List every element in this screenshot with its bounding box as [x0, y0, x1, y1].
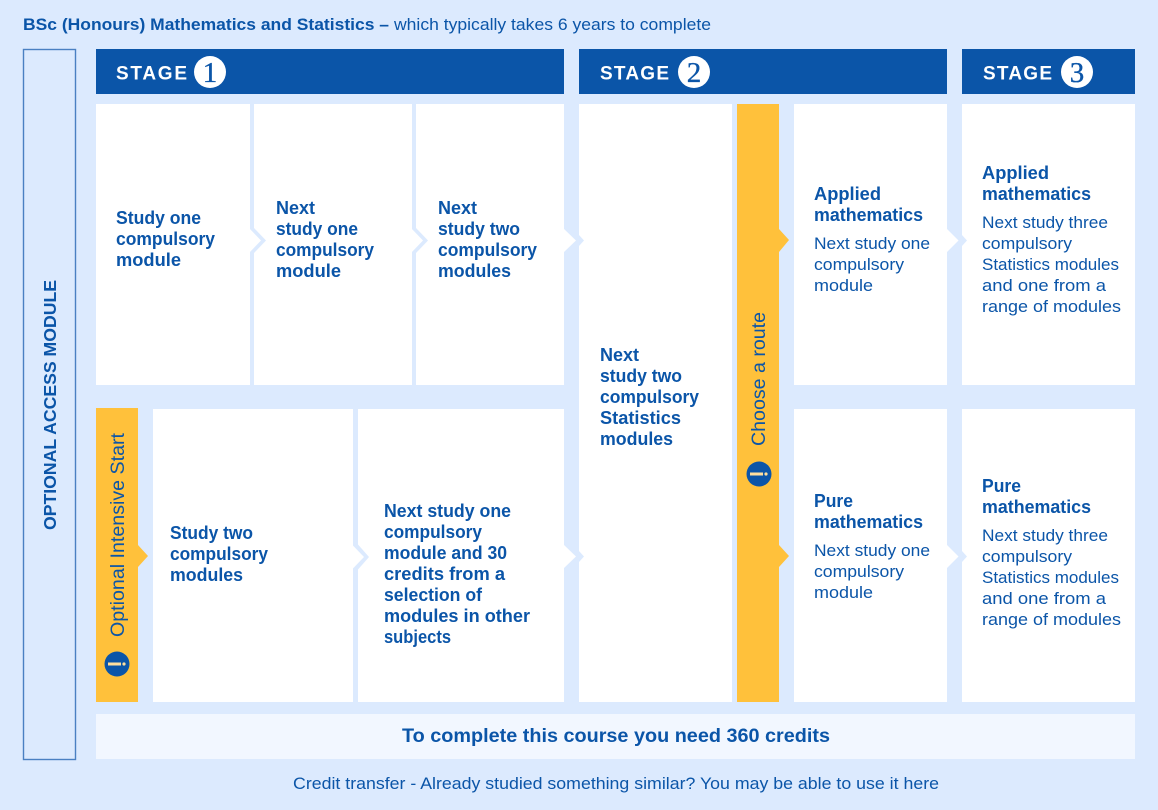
- card: stage 1 third modules: modules: [438, 261, 511, 281]
- card: stage 2 compulsory statistics modules: modules: [600, 429, 673, 449]
- card: stage 3 applied mathematics: Applied: [982, 163, 1049, 183]
- header: stage 3: [962, 49, 1135, 94]
- card: stage 1 first module: module: [116, 250, 181, 270]
- card: stage 3 applied mathematics: Statistics modules: [982, 255, 1119, 274]
- card: stage 1 second module: module: [276, 261, 341, 281]
- header: stage 2: [579, 49, 947, 94]
- card: stage 3 applied mathematics: and one from a: [982, 276, 1107, 295]
- card: intensive start first modules: [153, 409, 353, 702]
- header: stage 3: STAGE: [983, 64, 1052, 84]
- card: stage 3 pure mathematics: Next study three: [982, 526, 1108, 545]
- card: intensive start first modules: Study two: [170, 523, 253, 543]
- card: stage 2 pure mathematics: mathematics: [814, 512, 923, 532]
- card: stage 3 pure mathematics: Pure: [982, 476, 1021, 496]
- callout: optional intensive start: Optional Intensive Start: [108, 432, 129, 637]
- card: intensive start next modules: modules in other: [384, 606, 530, 626]
- card: stage 3 pure mathematics: mathematics: [982, 497, 1091, 517]
- card: stage 1 second module: study one: [276, 219, 358, 239]
- card: intensive start next modules: Next study one: [384, 501, 511, 521]
- title: BSc (Honours) Mathematics and Statistics –: [23, 15, 389, 34]
- card: stage 2 applied mathematics: Next study one: [814, 234, 930, 253]
- card: stage 2 compulsory statistics modules: compulsory: [600, 387, 699, 407]
- credits bar: [96, 714, 1135, 759]
- icon: exclamation mark: [104, 652, 130, 676]
- card: stage 1 third modules: [411, 104, 564, 385]
- card: intensive start next modules: selection of: [384, 585, 483, 605]
- card: intensive start next modules: compulsory: [384, 522, 482, 542]
- card: stage 3 pure mathematics: compulsory: [982, 547, 1073, 566]
- card: stage 1 second module: [249, 104, 412, 385]
- card: stage 1 first module: compulsory: [116, 229, 215, 249]
- card: stage 3 applied mathematics: mathematics: [982, 184, 1091, 204]
- footer: credit transfer note: Credit transfer - Already studied something similar? You may be able to use it here: [293, 774, 939, 793]
- card: stage 1 third modules: Next: [438, 198, 477, 218]
- card: stage 2 pure mathematics: Pure: [814, 491, 853, 511]
- card: stage 2 pure mathematics: module: [814, 583, 873, 602]
- card: stage 3 applied mathematics: [946, 104, 1135, 385]
- card: stage 2 compulsory statistics modules: Next: [600, 345, 639, 365]
- header: stage 1: 1: [203, 57, 217, 89]
- card: intensive start next modules: subjects: [384, 627, 451, 647]
- card: stage 1 second module: compulsory: [276, 240, 374, 260]
- card: stage 3 applied mathematics: Next study three: [982, 213, 1108, 232]
- card: stage 2 compulsory statistics modules: [563, 104, 732, 702]
- card: stage 3 pure mathematics: [946, 409, 1135, 702]
- header: stage 1: [96, 49, 564, 94]
- card: stage 1 first module: [96, 104, 250, 385]
- card: stage 2 compulsory statistics modules: study two: [600, 366, 682, 386]
- card: stage 2 applied mathematics: [794, 104, 947, 385]
- card: stage 2 applied mathematics: compulsory: [814, 255, 905, 274]
- header: stage 2: 2: [687, 57, 701, 89]
- icon: exclamation mark: [746, 462, 772, 486]
- callout: choose a route: Choose a route: [749, 312, 770, 446]
- panel: optional access module: [24, 50, 76, 760]
- card: stage 1 first module: Study one: [116, 208, 201, 228]
- card: stage 3 applied mathematics: compulsory: [982, 234, 1073, 253]
- card: stage 2 compulsory statistics modules: Statistics: [600, 408, 681, 428]
- card: stage 1 second module: Next: [276, 198, 315, 218]
- panel: optional access module: OPTIONAL ACCESS MODULE: [40, 280, 60, 530]
- card: intensive start next modules: credits from a: [384, 564, 506, 584]
- card: stage 2 pure mathematics: [794, 409, 947, 702]
- header: stage 1: STAGE: [116, 64, 187, 84]
- card: stage 3 pure mathematics: and one from a: [982, 589, 1107, 608]
- card: stage 1 third modules: study two: [438, 219, 520, 239]
- card: stage 3 applied mathematics: range of modules: [982, 297, 1121, 316]
- card: stage 2 pure mathematics: compulsory: [814, 562, 905, 581]
- header: stage 2: STAGE: [600, 64, 669, 84]
- card: intensive start next modules: [352, 409, 564, 702]
- title: [23, 15, 711, 34]
- card: stage 2 pure mathematics: Next study one: [814, 541, 930, 560]
- card: stage 2 applied mathematics: Applied: [814, 184, 881, 204]
- card: stage 3 pure mathematics: range of modules: [982, 610, 1121, 629]
- callout: choose a route: [737, 104, 789, 702]
- card: stage 1 third modules: compulsory: [438, 240, 537, 260]
- card: stage 3 pure mathematics: Statistics modules: [982, 568, 1119, 587]
- card: stage 2 applied mathematics: mathematics: [814, 205, 923, 225]
- credits bar: To complete this course you need 360 credits: [402, 726, 830, 747]
- title: which typically takes 6 years to complete: [393, 15, 711, 34]
- header: stage 3: 3: [1070, 57, 1084, 89]
- card: intensive start first modules: modules: [170, 565, 243, 585]
- card: intensive start first modules: compulsory: [170, 544, 268, 564]
- card: intensive start next modules: module and 30: [384, 543, 507, 563]
- card: stage 2 applied mathematics: module: [814, 276, 873, 295]
- callout: optional intensive start: [96, 408, 148, 702]
